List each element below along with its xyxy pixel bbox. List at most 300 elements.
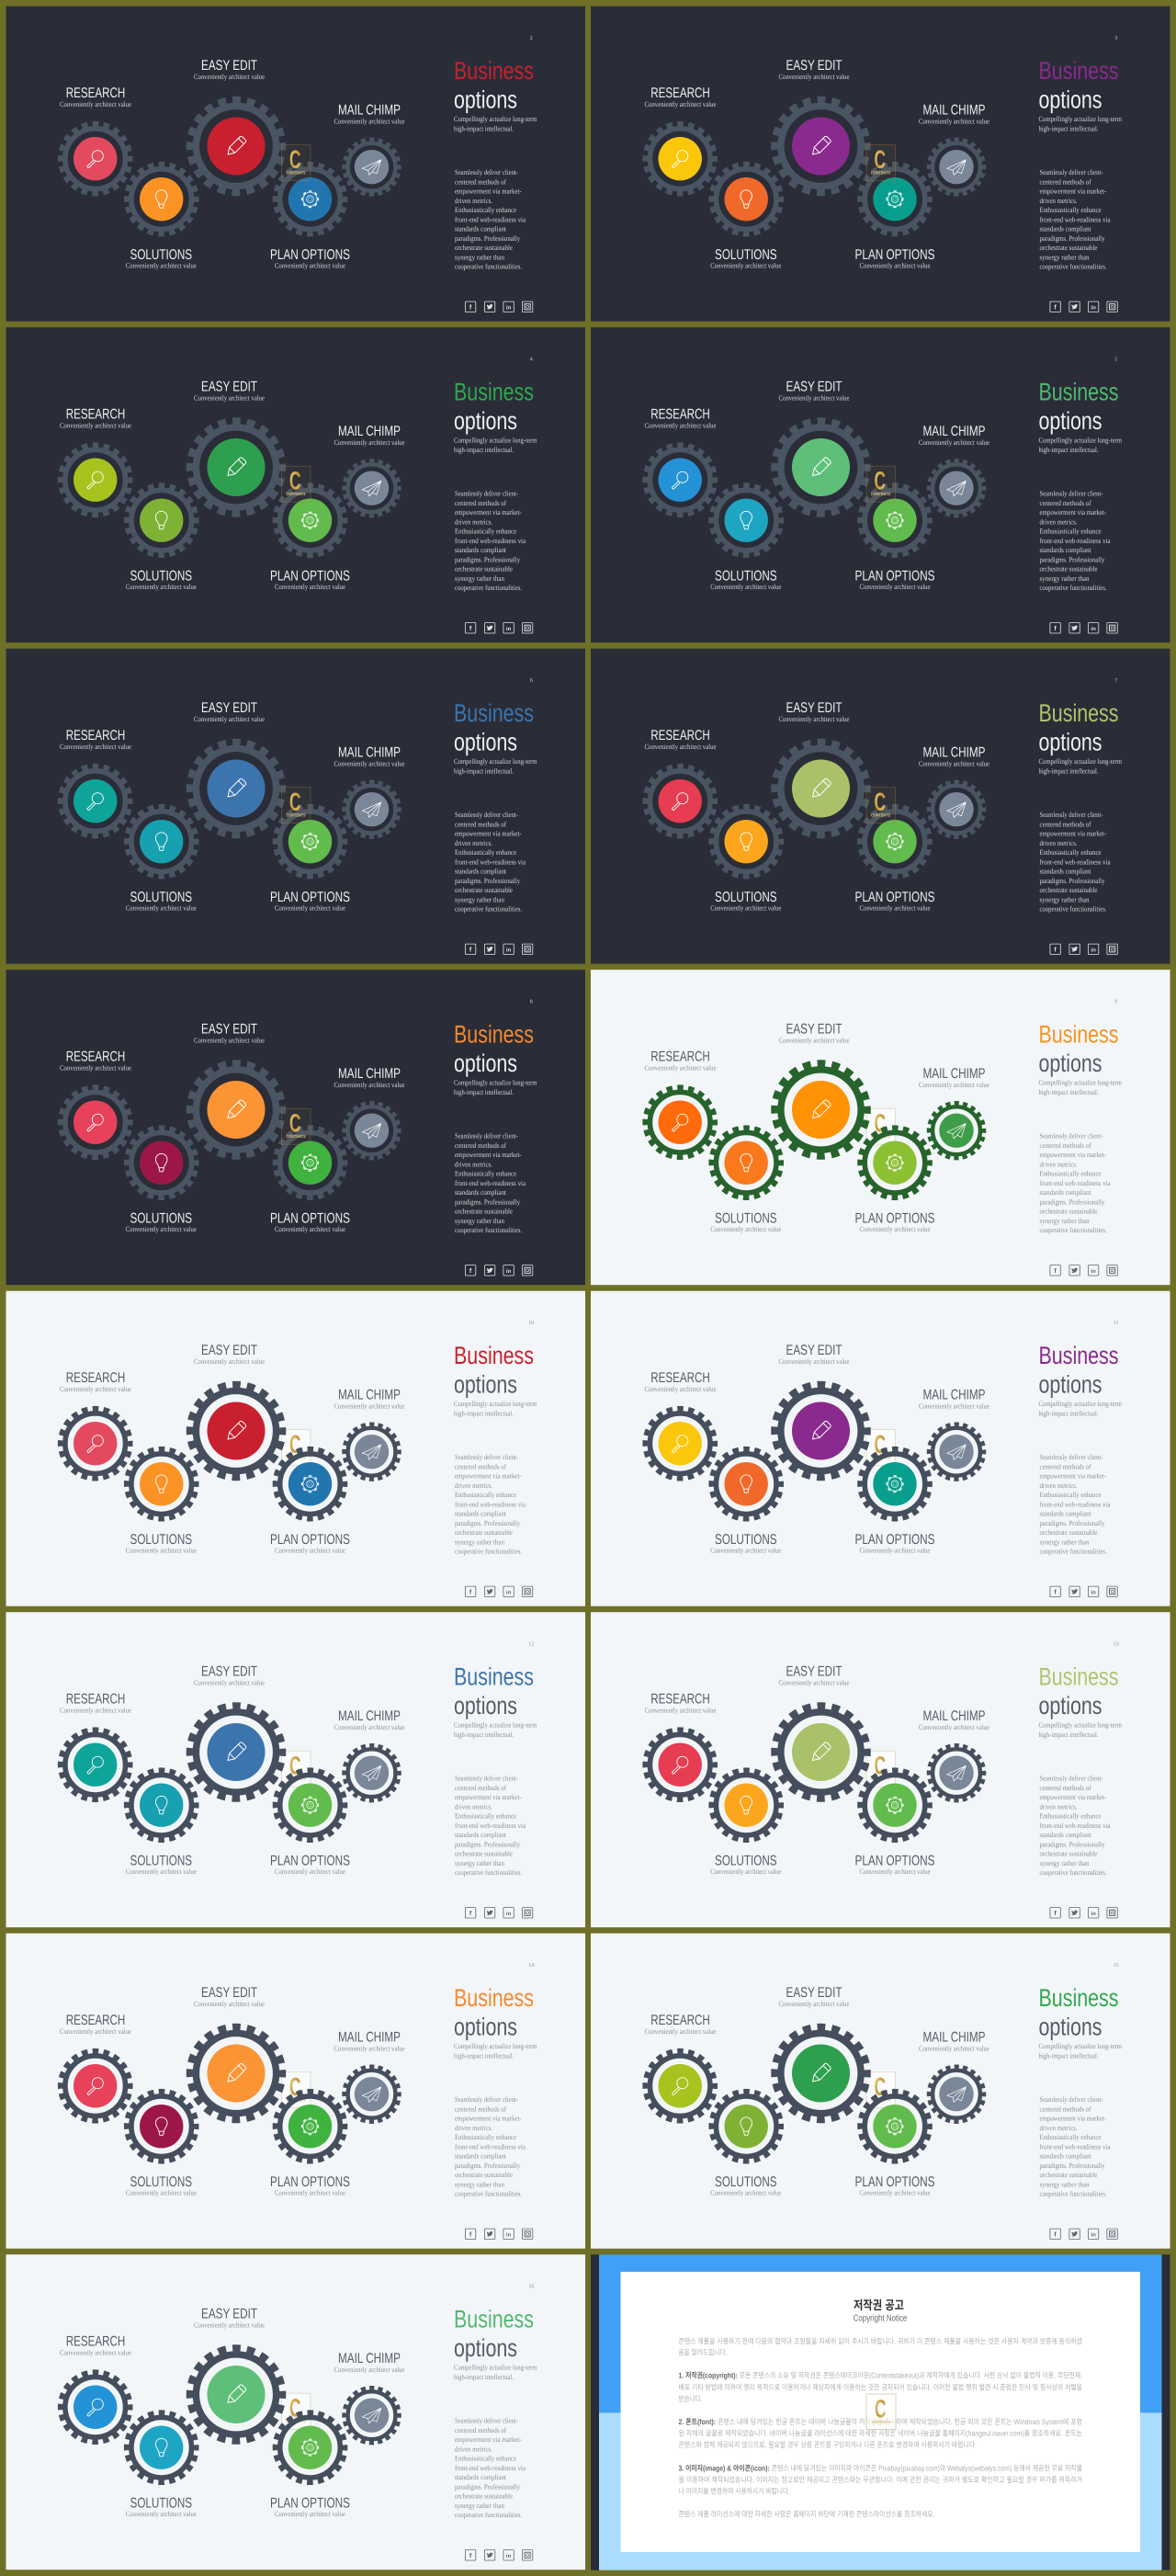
label: solutions <box>710 1853 782 1876</box>
page number: 6 <box>530 678 533 684</box>
body text: synergy rather than <box>1040 1217 1090 1225</box>
body text: synergy rather than <box>1040 895 1090 903</box>
panel: slide 12 blue light <box>6 1612 585 1927</box>
label: research: RESEARCH <box>66 1691 125 1707</box>
gear: plan options <box>276 165 345 234</box>
page number: 13 <box>1114 1642 1119 1648</box>
heading: options <box>1038 2013 1102 2040</box>
label: solutions: SOLUTIONS <box>715 247 777 263</box>
panel: copyright notice <box>591 2254 1170 2570</box>
label: solutions <box>710 247 782 270</box>
notice footer: 콘텐스 제품 라이선스에 대한 자세한 사항은 홈페이지 하단에 기재한 콘텐스라이선스를 참조하세요. <box>678 2510 935 2519</box>
heading <box>454 1020 534 1077</box>
social icons: in <box>1091 626 1096 632</box>
label: plan options: Conveniently architect value <box>860 583 931 591</box>
body text: Enthusiastically enhance <box>1040 206 1102 214</box>
body text: Seamlessly deliver client- <box>1040 2095 1103 2104</box>
label: plan options: Conveniently architect value <box>860 2189 931 2197</box>
body text: synergy rather than <box>455 895 504 903</box>
body text: standards compliant <box>455 868 507 876</box>
body text: synergy rather than <box>455 2180 504 2188</box>
page number: 8 <box>530 1000 533 1005</box>
gear: easy edit <box>775 421 867 514</box>
label: easy edit: Conveniently architect value <box>779 394 850 403</box>
label: solutions: Conveniently architect value <box>710 262 782 270</box>
label: solutions: SOLUTIONS <box>715 2174 777 2190</box>
body text: Enthusiastically enhance <box>1040 2133 1102 2141</box>
body text: cooperative functionalities. <box>455 1548 522 1556</box>
intro text: Compellingly actualize long-term <box>1038 1400 1123 1408</box>
gear: easy edit <box>775 1063 867 1156</box>
intro text: Compellingly actualize long-term <box>1038 1720 1123 1729</box>
watermark badge: CONTENTS <box>871 1134 890 1139</box>
gear: research <box>61 2051 130 2121</box>
body text: empowerment via market- <box>455 187 522 196</box>
body text <box>455 2417 526 2519</box>
body text: orchestrate sustainable <box>455 1850 513 1858</box>
gear: research <box>61 445 130 515</box>
body text: cooperative functionalities. <box>455 2190 522 2198</box>
body text: centered methods of <box>1040 1784 1091 1792</box>
body text: orchestrate sustainable <box>455 1208 513 1216</box>
heading <box>1038 1984 1119 2040</box>
body text: empowerment via market- <box>1040 1793 1106 1801</box>
gear: mail chimp <box>929 1103 984 1158</box>
gear: solutions <box>711 1449 781 1519</box>
heading: Business <box>1038 1342 1119 1369</box>
label: solutions <box>126 1532 197 1555</box>
label: mail chimp: MAIL CHIMP <box>338 1387 401 1402</box>
intro text: Compellingly actualize long-term <box>454 2042 537 2050</box>
label: research: RESEARCH <box>650 1691 710 1707</box>
label: research: RESEARCH <box>650 2013 710 2028</box>
label: research <box>60 2334 131 2356</box>
intro text <box>454 1720 537 1739</box>
label: solutions <box>126 890 197 913</box>
body text: Seamlessly deliver client- <box>1040 490 1103 498</box>
watermark badge <box>866 466 895 502</box>
body text: orchestrate sustainable <box>455 565 513 573</box>
label: plan options: Conveniently architect value <box>275 2189 345 2197</box>
body text: orchestrate sustainable <box>1040 1850 1098 1858</box>
heading <box>1038 57 1119 113</box>
intro text <box>454 1079 537 1096</box>
body text: empowerment via market- <box>1040 1151 1106 1159</box>
intro text: Compellingly actualize long-term <box>1038 1078 1123 1086</box>
label: solutions: SOLUTIONS <box>130 1532 192 1548</box>
heading <box>454 1342 534 1398</box>
gear: easy edit <box>775 1384 867 1478</box>
heading: options <box>454 1370 517 1398</box>
body text: front-end web-readiness via <box>455 2142 526 2150</box>
body text: Seamlessly deliver client- <box>455 490 518 498</box>
body text: synergy rather than <box>1040 1859 1090 1867</box>
social icons: f <box>469 625 472 632</box>
social icons: f <box>469 1267 472 1275</box>
label: research <box>645 1370 717 1393</box>
intro text <box>454 2364 537 2381</box>
page number: 4 <box>530 357 533 363</box>
label: solutions <box>126 2496 197 2518</box>
watermark badge <box>281 466 311 502</box>
notice section: image and icon: 나 이미지를 변경하여 사용하시기 바랍니다. <box>678 2486 790 2495</box>
intro text: high-impact intellectual. <box>1038 1088 1099 1096</box>
gear: easy edit <box>189 1384 283 1478</box>
label: mail chimp: MAIL CHIMP <box>922 2029 985 2045</box>
panel: slide 2 red dark <box>6 6 585 322</box>
label: plan options: PLAN OPTIONS <box>854 1210 935 1226</box>
intro text: Compellingly actualize long-term <box>454 757 537 766</box>
label: plan options <box>854 1853 935 1876</box>
social icons <box>465 2229 533 2239</box>
gear: solutions <box>127 485 197 555</box>
social icons: f <box>1054 625 1057 632</box>
body text: driven metrics. <box>455 1160 492 1168</box>
heading: Business <box>454 57 534 85</box>
label: mail chimp <box>919 102 989 125</box>
body text: paradigms. Professionally <box>455 877 520 885</box>
label: research: Conveniently architect value <box>60 422 131 430</box>
gear: plan options <box>276 2412 345 2482</box>
gear: research <box>645 1409 715 1479</box>
intro text: Compellingly actualize long-term <box>454 1078 537 1086</box>
label: plan options <box>854 890 935 913</box>
label: plan options <box>854 568 935 591</box>
label: research <box>60 1370 131 1393</box>
body text: paradigms. Professionally <box>455 1197 520 1206</box>
label: research <box>60 406 131 430</box>
label: research: Conveniently architect value <box>645 2027 717 2036</box>
label: mail chimp: Conveniently architect value <box>919 1081 989 1089</box>
label: solutions <box>126 2174 197 2197</box>
label: plan options <box>854 247 935 270</box>
body text: front-end web-readiness via <box>1040 1821 1111 1830</box>
label: research: Conveniently architect value <box>645 743 717 751</box>
panel: slide 11 purple light <box>591 1291 1170 1606</box>
watermark badge: CONTENTS <box>287 813 305 818</box>
body text: Seamlessly deliver client- <box>1040 1453 1103 1461</box>
heading: Business <box>1038 699 1119 727</box>
body text: synergy rather than <box>1040 2180 1090 2188</box>
body text: centered methods of <box>455 2105 506 2113</box>
gear: easy edit <box>189 1063 283 1156</box>
heading: options <box>454 85 517 113</box>
label: mail chimp: Conveniently architect value <box>334 438 405 447</box>
gear: plan options <box>276 1128 345 1197</box>
heading <box>1038 379 1119 435</box>
body text: cooperative functionalities. <box>1040 1226 1106 1234</box>
body text: Seamlessly deliver client- <box>1040 811 1103 819</box>
gear: solutions <box>711 165 781 234</box>
label: easy edit <box>779 1343 850 1366</box>
label: plan options <box>854 1532 935 1555</box>
social icons: f <box>469 2230 472 2238</box>
gear: plan options <box>860 1128 930 1197</box>
intro text: high-impact intellectual. <box>454 2373 514 2381</box>
page number: 14 <box>528 1963 534 1969</box>
panel: slide 13 lime light <box>591 1612 1170 1927</box>
label: plan options: Conveniently architect value <box>275 1225 345 1233</box>
label: mail chimp <box>919 2029 989 2052</box>
label: solutions: Conveniently architect value <box>126 1867 197 1876</box>
body text: driven metrics. <box>1040 1481 1077 1490</box>
label: solutions: SOLUTIONS <box>715 1210 777 1226</box>
notice section: font: 2. 폰트(font): 콘텐스 내에 담겨있는 한글 폰트는 네이버 나눔글꼴의 저작권을 준수하여 제작되었습니다. 한글 외의 모든 폰트는 Windows System에 포함 <box>678 2417 1082 2426</box>
watermark badge: CONTENTS <box>871 1456 890 1460</box>
label: mail chimp <box>919 1066 989 1089</box>
watermark badge <box>866 145 895 181</box>
label: research <box>60 1691 131 1715</box>
body text: synergy rather than <box>1040 574 1090 583</box>
heading: options <box>1038 728 1102 755</box>
body text <box>455 1774 526 1877</box>
label: solutions <box>710 890 782 913</box>
heading <box>454 1984 534 2040</box>
gear: plan options <box>276 1449 345 1519</box>
label: mail chimp: Conveniently architect value <box>334 759 405 767</box>
body text <box>1040 811 1111 914</box>
label: solutions: Conveniently architect value <box>126 1225 197 1233</box>
social icons: in <box>1091 1268 1096 1275</box>
intro text <box>454 2042 537 2060</box>
body text: orchestrate sustainable <box>1040 244 1098 252</box>
social icons: in <box>506 1268 512 1275</box>
watermark badge: CONTENTS <box>287 492 305 496</box>
watermark badge <box>866 2394 896 2430</box>
label: mail chimp: MAIL CHIMP <box>338 424 401 439</box>
body text: front-end web-readiness via <box>1040 1179 1111 1187</box>
body text: empowerment via market- <box>1040 508 1106 516</box>
label: solutions: SOLUTIONS <box>130 1853 192 1868</box>
gear: plan options <box>276 807 345 877</box>
body text: standards compliant <box>455 225 507 233</box>
watermark badge: C <box>289 1430 301 1458</box>
body text: driven metrics. <box>455 517 492 526</box>
label: easy edit <box>194 379 265 403</box>
label: plan options: PLAN OPTIONS <box>270 1210 350 1226</box>
label: plan options: PLAN OPTIONS <box>270 1532 350 1548</box>
heading: options <box>454 2334 517 2362</box>
label: research: Conveniently architect value <box>645 1385 717 1393</box>
label: mail chimp <box>919 1387 989 1410</box>
body text: front-end web-readiness via <box>455 1500 526 1508</box>
body text: cooperative functionalities. <box>455 905 522 914</box>
body text: orchestrate sustainable <box>455 2492 513 2501</box>
body text: orchestrate sustainable <box>1040 1208 1098 1216</box>
body text: driven metrics. <box>455 2445 492 2453</box>
body text: empowerment via market- <box>455 1793 522 1801</box>
intro text: high-impact intellectual. <box>1038 2051 1099 2060</box>
panel: slide 9 orange light green gears <box>591 970 1170 1285</box>
body text: cooperative functionalities. <box>1040 263 1106 271</box>
panel: slide 6 blue dark <box>6 649 585 964</box>
body text: Enthusiastically enhance <box>455 1170 516 1178</box>
gear: plan options <box>860 1449 930 1519</box>
body text: driven metrics. <box>455 1481 492 1490</box>
body text: centered methods of <box>1040 1141 1091 1150</box>
gear: solutions <box>127 1449 197 1519</box>
body text: driven metrics. <box>455 1802 492 1810</box>
gear: mail chimp <box>344 1745 400 1800</box>
body text: Seamlessly deliver client- <box>455 1131 518 1140</box>
intro text: Compellingly actualize long-term <box>1038 757 1123 766</box>
label: mail chimp: Conveniently architect value <box>919 2044 989 2052</box>
body text: paradigms. Professionally <box>1040 2162 1104 2170</box>
page number: 16 <box>528 2285 534 2290</box>
watermark badge: C <box>289 1752 301 1780</box>
watermark badge <box>281 145 311 181</box>
label: solutions: SOLUTIONS <box>715 568 777 584</box>
watermark badge <box>866 788 895 823</box>
label: plan options <box>270 890 350 913</box>
gear: research <box>645 2051 715 2121</box>
label: mail chimp: MAIL CHIMP <box>338 1708 401 1724</box>
label: solutions: Conveniently architect value <box>126 1547 197 1555</box>
label: plan options <box>270 1532 350 1555</box>
label: easy edit: EASY EDIT <box>201 1985 257 2001</box>
gear: solutions <box>711 1128 781 1197</box>
label: research: RESEARCH <box>66 2013 125 2028</box>
label: easy edit <box>194 58 265 81</box>
body text: synergy rather than <box>455 253 504 261</box>
body text: front-end web-readiness via <box>455 857 526 866</box>
body text: Seamlessly deliver client- <box>455 168 518 176</box>
label: easy edit: EASY EDIT <box>201 58 257 74</box>
body text: Seamlessly deliver client- <box>455 2416 518 2424</box>
label: solutions: SOLUTIONS <box>130 247 192 263</box>
label: solutions: Conveniently architect value <box>710 583 782 591</box>
body text: Enthusiastically enhance <box>455 206 516 214</box>
body text: driven metrics. <box>1040 839 1077 847</box>
body text: orchestrate sustainable <box>455 1528 513 1537</box>
label: solutions: Conveniently architect value <box>710 904 782 913</box>
label: solutions: Conveniently architect value <box>126 2510 197 2518</box>
body text: empowerment via market- <box>455 1151 522 1159</box>
label: mail chimp: MAIL CHIMP <box>922 744 985 760</box>
label: plan options: Conveniently architect value <box>860 1225 931 1233</box>
gear: plan options <box>276 485 345 555</box>
gear: mail chimp <box>344 140 400 195</box>
label: easy edit: Conveniently architect value <box>779 2000 850 2008</box>
watermark badge: C <box>289 1109 301 1138</box>
intro text <box>1038 1079 1123 1096</box>
label: plan options: PLAN OPTIONS <box>854 890 935 905</box>
watermark badge: C <box>289 145 301 174</box>
body text: paradigms. Professionally <box>455 2482 520 2491</box>
gear: research <box>61 1409 130 1479</box>
body text: paradigms. Professionally <box>455 1840 520 1848</box>
notice intro <box>678 2336 1082 2356</box>
body text <box>1040 168 1111 271</box>
body text: standards compliant <box>1040 546 1091 554</box>
gear: easy edit <box>189 99 283 193</box>
label: easy edit: Conveniently architect value <box>194 394 265 403</box>
body text: front-end web-readiness via <box>1040 537 1111 545</box>
notice section: copyright: 배포 기타 방법에 의하여 영리 목적으로 이용하거나 제삼자에게 이용하는 것은 금지되어 있습니다. 이러한 불법 행위 발견 시 준엄한 민사 및 형사상의 처벌을 <box>678 2382 1082 2391</box>
gear: easy edit <box>189 2026 283 2120</box>
intro text <box>1038 436 1123 454</box>
heading: options <box>454 1692 517 1719</box>
body text: standards compliant <box>1040 2152 1091 2161</box>
watermark badge: CONTENTS <box>287 1776 305 1781</box>
gear: research <box>61 2372 130 2442</box>
social icons: f <box>469 1588 472 1595</box>
label: plan options: PLAN OPTIONS <box>270 2495 350 2511</box>
label: mail chimp <box>334 2029 405 2052</box>
label: plan options: PLAN OPTIONS <box>854 1853 935 1868</box>
body text: standards compliant <box>455 2152 507 2161</box>
gear: plan options <box>276 2092 345 2162</box>
body text <box>1040 1132 1111 1234</box>
heading: Business <box>454 1342 534 1369</box>
body text: paradigms. Professionally <box>1040 1519 1104 1527</box>
watermark badge: CONTENTS <box>287 1456 305 1460</box>
heading: Business <box>1038 1020 1119 1048</box>
intro text: Compellingly actualize long-term <box>1038 2042 1123 2050</box>
social icons <box>1050 1586 1117 1597</box>
body text: driven metrics. <box>455 839 492 847</box>
label: mail chimp: Conveniently architect value <box>919 759 989 767</box>
body text: empowerment via market- <box>455 2114 522 2122</box>
label: research <box>645 85 717 108</box>
body text: centered methods of <box>1040 177 1091 186</box>
social icons <box>465 1586 533 1597</box>
body text: front-end web-readiness via <box>455 537 526 545</box>
body text: centered methods of <box>455 499 506 507</box>
social icons: in <box>1091 1589 1096 1595</box>
label: mail chimp: MAIL CHIMP <box>922 1066 985 1082</box>
body text: Enthusiastically enhance <box>455 1491 516 1499</box>
gear: research <box>645 766 715 836</box>
body text: Enthusiastically enhance <box>455 528 516 536</box>
intro text <box>1038 2042 1123 2060</box>
label: plan options: PLAN OPTIONS <box>854 568 935 584</box>
heading: options <box>1038 1050 1102 1077</box>
label: research: RESEARCH <box>650 407 710 423</box>
label: solutions <box>710 1532 782 1555</box>
body text: empowerment via market- <box>455 1471 522 1480</box>
label: solutions <box>126 1211 197 1233</box>
watermark badge: C <box>875 1109 886 1138</box>
label: easy edit: Conveniently architect value <box>779 1678 850 1686</box>
label: easy edit <box>194 700 265 723</box>
body text: cooperative functionalities. <box>455 1226 522 1234</box>
page number: 3 <box>1114 36 1117 41</box>
gear: easy edit <box>775 2026 867 2120</box>
gear: plan options <box>860 485 930 555</box>
social icons: f <box>1054 303 1057 311</box>
body text: front-end web-readiness via <box>1040 2142 1111 2150</box>
social icons <box>1050 1908 1117 1918</box>
heading: Business <box>454 699 534 727</box>
watermark badge: CONTENTS <box>871 813 890 818</box>
label: mail chimp: MAIL CHIMP <box>338 102 401 118</box>
label: mail chimp: MAIL CHIMP <box>338 744 401 760</box>
heading: options <box>1038 1692 1102 1719</box>
label: mail chimp <box>919 424 989 447</box>
gear: plan options <box>276 1770 345 1840</box>
watermark badge: CONTENTS <box>287 171 305 176</box>
gear: mail chimp <box>929 2067 984 2122</box>
watermark badge: CONTENTS <box>871 2420 891 2424</box>
social icons: in <box>1091 1911 1096 1917</box>
body text: paradigms. Professionally <box>455 2162 520 2170</box>
body text: front-end web-readiness via <box>1040 215 1111 223</box>
label: research: RESEARCH <box>66 2333 125 2349</box>
body text: empowerment via market- <box>1040 830 1106 838</box>
body text: centered methods of <box>1040 1462 1091 1470</box>
gear: mail chimp <box>344 782 400 837</box>
